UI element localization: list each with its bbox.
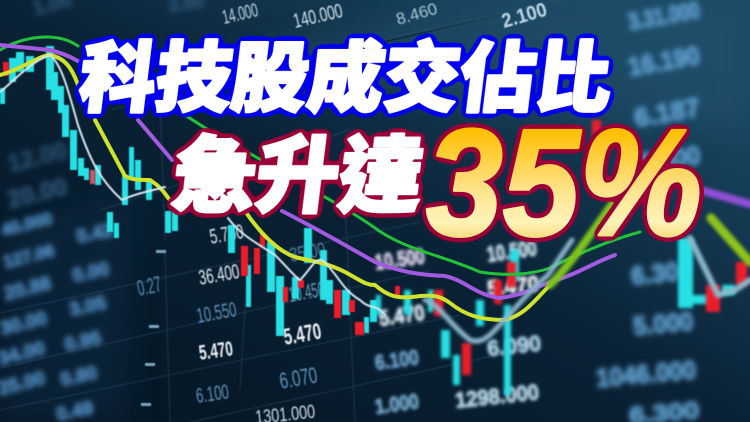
blurred table numbers: left columns: 40.000: [0, 209, 54, 240]
blurred table numbers: far right column: 6.30: [629, 256, 680, 291]
line: purple: [0, 45, 615, 298]
table numbers: middle columns: 10.450: [287, 278, 326, 307]
blurred table numbers: far right column: 16.190: [626, 40, 702, 82]
blurred table numbers: right columns: 10.500: [485, 235, 538, 267]
blurred table numbers: right columns: 5.470: [486, 271, 540, 301]
table numbers: middle columns: [135, 0, 550, 422]
headline figure: 35%: 35%: [426, 98, 702, 268]
line: green: [0, 37, 640, 274]
blurred table numbers: left columns: 0.00: [71, 259, 111, 287]
blurred table numbers: left columns: 127.06: [1, 241, 56, 272]
blurred table numbers: left columns: 20.88: [2, 273, 53, 305]
blurred table numbers: far right column: [595, 0, 702, 422]
table numbers: middle columns: 5.470: [197, 337, 234, 365]
table numbers: middle columns: 5.470: [281, 318, 323, 350]
line: yellow: [0, 55, 550, 320]
blurred table numbers: right columns: 6.090: [486, 330, 542, 361]
headline line 2: 急升達: [168, 130, 428, 223]
table numbers: middle columns: 5.750: [208, 220, 245, 249]
blurred table numbers: right columns: 1298.000: [454, 379, 540, 413]
candlesticks: red: [3, 62, 747, 375]
blurred table numbers: left columns: 0.95: [63, 328, 104, 356]
table numbers: middle columns: 0.27: [135, 271, 164, 301]
line: white: [0, 55, 385, 315]
blurred table numbers: left columns: 0.80: [59, 363, 99, 391]
blurred table numbers: left columns: 12.00: [5, 137, 70, 178]
blurred table numbers: right columns: 5.470: [377, 300, 426, 331]
table grid lines: [0, 0, 560, 422]
table numbers: middle columns: 6.070: [277, 362, 319, 394]
blurred table numbers: far right column: 5.000: [632, 306, 694, 341]
blurred table numbers: left columns: 3.05: [68, 293, 109, 321]
table numbers: middle columns: 36.400: [197, 260, 241, 290]
headline line 1: 科技股成交佔比: [75, 37, 617, 122]
line: olive thick: [550, 170, 640, 285]
blurred table numbers: right columns: [373, 235, 542, 419]
blurred table numbers: right columns: 10.500: [373, 243, 426, 275]
moving average lines: [0, 37, 750, 341]
blurred table numbers: left columns: [0, 0, 205, 422]
blurred table numbers: left columns: 0.42: [75, 220, 115, 248]
blurred table numbers: right columns: 6.100: [373, 346, 420, 375]
blurred table numbers: far right column: 5.800: [637, 140, 702, 178]
blurred table numbers: far right column: 1046.000: [595, 354, 697, 393]
blurred table numbers: left columns: 20.00: [5, 173, 70, 214]
table numbers: middle columns: 35.00: [288, 239, 327, 267]
table dashes: [141, 250, 166, 406]
table numbers: middle columns: 6.100: [194, 381, 230, 408]
table numbers: middle columns: 10.550: [195, 298, 238, 328]
blurred table numbers: far right column: 6.187: [632, 92, 702, 133]
blurred table numbers: right columns: 1.000: [373, 390, 420, 419]
